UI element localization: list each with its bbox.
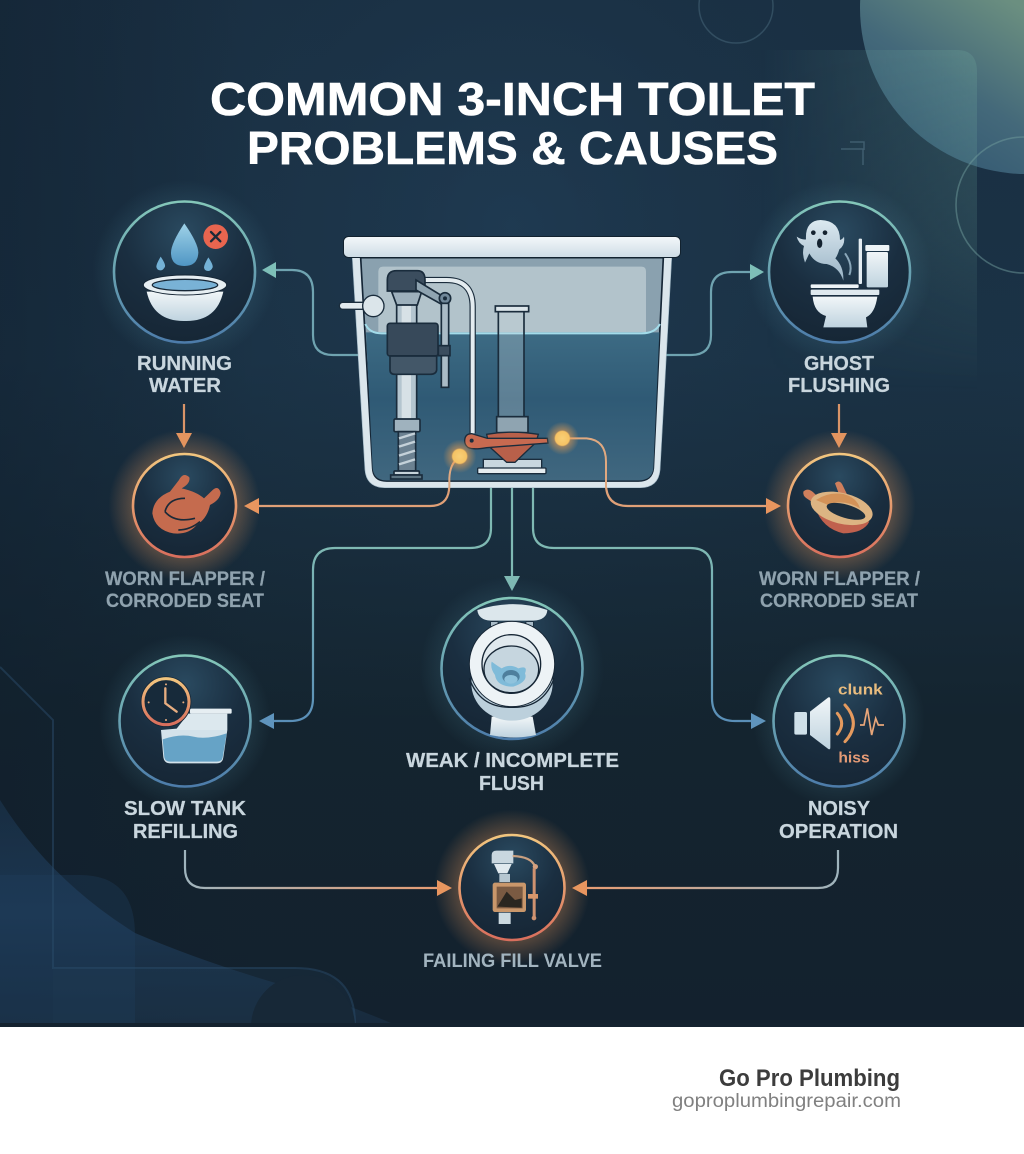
valve head: [387, 271, 425, 291]
label: worn flapper corroded seat right: CORRODED SEAT: [760, 591, 918, 612]
arrow: tank to slow refill: [259, 488, 491, 729]
label: weak incomplete flush: FLUSH: [479, 773, 544, 795]
label: slow tank refilling: SLOW TANK: [124, 798, 247, 820]
tank lid: [344, 236, 680, 258]
label: weak incomplete flush: WEAK / INCOMPLETE: [406, 750, 619, 772]
refill tube: [420, 280, 473, 433]
icon: clock and tank: [141, 676, 232, 763]
arrow: tank to ghost flushing: [665, 264, 764, 355]
label: worn flapper corroded seat right: WORN FLAPPER /: [759, 569, 921, 590]
icon: error badge: [203, 224, 228, 249]
arrow: slow refill to fill valve: [185, 850, 452, 896]
icon: corroded seat: [803, 481, 876, 533]
label: slow tank refilling: [124, 798, 247, 843]
label: running water: [137, 353, 232, 397]
label: noisy operation: OPERATION: [779, 821, 898, 843]
icon: speaker and sound: [794, 682, 884, 767]
arrow: noisy operation to fill valve: [572, 850, 838, 896]
arrow: tank to weak flush: [504, 488, 520, 591]
water: [366, 332, 659, 480]
label: worn flapper corroded seat right: [759, 569, 921, 612]
icon: speaker and sound: clunk: [838, 682, 884, 698]
icon: toilet from above: [469, 604, 555, 737]
website: goproplumbingrepair.com: [672, 1091, 901, 1112]
flapper: [487, 432, 538, 462]
label: worn flapper corroded seat left: [105, 569, 266, 612]
icon: worn flapper: [152, 475, 221, 534]
label: ghost flushing: GHOST: [804, 353, 874, 375]
node: worn flapper left: [105, 430, 266, 612]
label: slow tank refilling: REFILLING: [133, 821, 238, 843]
icon: speaker and sound: hiss: [838, 751, 870, 767]
fill valve: [387, 271, 451, 479]
icon: ghost and toilet: [797, 220, 889, 327]
flush valve seat: [478, 459, 546, 474]
overflow tube: [495, 306, 529, 433]
label: running water: WATER: [149, 375, 222, 397]
air space panel: [378, 267, 646, 332]
node: noisy operation: [753, 635, 925, 843]
float cup: [387, 323, 438, 356]
title: [210, 73, 815, 174]
connector arrows: [176, 262, 847, 896]
arrow: tank to running water: [262, 262, 358, 355]
label: noisy operation: NOISY: [808, 798, 871, 820]
wires: [449, 438, 606, 488]
node: running water: [92, 180, 276, 397]
glowing points: [443, 440, 476, 473]
valve stem: [397, 303, 417, 423]
label: weak incomplete flush: [406, 750, 619, 795]
title: COMMON 3-INCH TOILET: [210, 73, 815, 125]
label: ghost flushing: FLUSHING: [788, 375, 890, 397]
float arm: [416, 280, 445, 304]
arrow: ghost flushing to worn flapper: [831, 404, 847, 448]
tank body: [352, 258, 672, 488]
node: slow tank refilling: [99, 635, 271, 843]
central toilet tank diagram: [339, 258, 672, 488]
node: weak incomplete flush: [406, 576, 619, 795]
icon: corroded valve: [492, 851, 538, 924]
arrow: tank flapper to left worn flapper: [244, 458, 459, 514]
node: worn flapper right: [759, 430, 921, 612]
brand name: Go Pro Plumbing: [719, 1065, 900, 1092]
decorative shapes bottom left: [0, 667, 1024, 1079]
label: worn flapper corroded seat left: CORRODED SEAT: [106, 591, 264, 612]
label: worn flapper corroded seat left: WORN FLAPPER /: [105, 569, 266, 590]
icon: water drop and bowl: [143, 223, 228, 321]
label: ghost flushing: [788, 353, 890, 397]
label: noisy operation: [779, 798, 898, 843]
handle lever: [339, 295, 384, 317]
footer strip: [0, 1027, 1024, 1154]
title: PROBLEMS & CAUSES: [247, 122, 778, 174]
label: failing fill valve: FAILING FILL VALVE: [423, 951, 602, 972]
arrow: tank to noisy operation: [533, 488, 766, 729]
node: ghost flushing: [748, 180, 932, 397]
decorative shapes top right: [698, 0, 1024, 322]
water line: [365, 324, 660, 333]
node: failing fill valve: [423, 810, 602, 972]
arrow: tank flapper to right worn flapper: [562, 438, 781, 514]
label: running water: RUNNING: [137, 353, 232, 375]
arrow: running water to worn flapper: [176, 404, 192, 448]
